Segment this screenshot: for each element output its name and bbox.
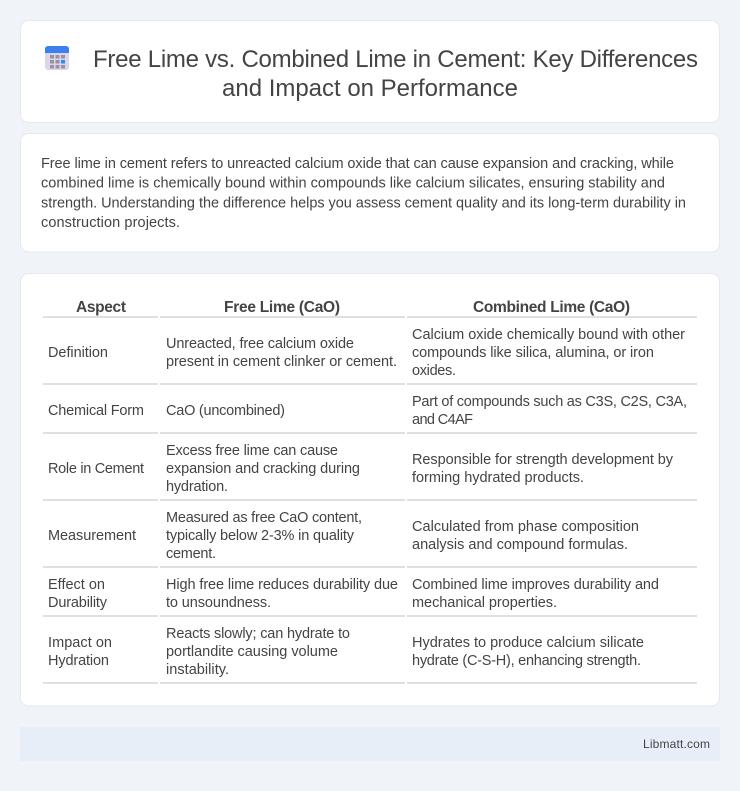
row: definition [48, 327, 685, 379]
row: impact on hydration: portlandite causing volume [166, 644, 338, 660]
row: chemical form: Part of compounds such as C3S, C2S, C3A, [412, 394, 687, 410]
row: effect on durability: to unsoundness. [166, 595, 271, 611]
row: definition: Calcium oxide chemically bound with other [412, 327, 685, 343]
row: effect on durability: Combined lime improves durability and [412, 577, 659, 593]
footer credit: Libmatt.com [643, 737, 710, 751]
row: definition: oxides. [412, 363, 456, 379]
row: measurement: typically below 2-3% in quality [166, 528, 355, 544]
intro text [41, 156, 686, 231]
row: definition: present in cement clinker or cement. [166, 354, 397, 370]
intro text: Free lime in cement refers to unreacted calcium oxide that can cause expansion and cracking, while [41, 156, 674, 172]
row: definition: Definition [48, 345, 108, 361]
row: chemical form: Chemical Form [48, 403, 144, 419]
row: measurement [48, 510, 639, 562]
row: measurement: Measurement [48, 528, 136, 544]
table header row [76, 299, 630, 316]
row: measurement: analysis and compound formulas. [412, 537, 628, 553]
panel: introduction [20, 134, 720, 252]
row: definition: Unreacted, free calcium oxide [166, 336, 354, 352]
row: impact on hydration: Reacts slowly; can hydrate to [166, 626, 350, 642]
row: chemical form: and C4AF [412, 412, 473, 428]
row: role in cement [48, 443, 674, 495]
row: impact on hydration [48, 626, 644, 678]
panel: comparison table [20, 274, 720, 706]
intro text: strength. Understanding the difference helps you assess cement quality and its long-term durability in [41, 196, 686, 212]
intro text: combined lime is chemically bound within compounds like calcium silicates, ensuring stability and [41, 176, 665, 192]
row: measurement: Calculated from phase composition [412, 519, 639, 535]
row: effect on durability: Durability [48, 595, 108, 611]
row: effect on durability [48, 577, 659, 611]
title [93, 46, 698, 102]
row: chemical form [48, 394, 687, 428]
row: impact on hydration: Hydration [48, 653, 109, 669]
icon: calendar [45, 46, 69, 70]
footer bar [20, 727, 720, 761]
title: Free Lime vs. Combined Lime in Cement: Key Differences [93, 46, 698, 73]
row: definition: compounds like silica, alumina, or iron [412, 345, 654, 361]
row: chemical form: CaO (uncombined) [166, 403, 285, 419]
row: impact on hydration: Hydrates to produce calcium silicate [412, 635, 644, 651]
row: role in cement: Responsible for strength development by [412, 452, 674, 468]
row: role in cement: forming hydrated products. [412, 470, 584, 486]
row: effect on durability: mechanical properties. [412, 595, 557, 611]
row: effect on durability: High free lime reduces durability due [166, 577, 398, 593]
intro text: construction projects. [41, 215, 180, 231]
table header row: Combined Lime (CaO) [473, 299, 630, 316]
row: measurement: Measured as free CaO content, [166, 510, 362, 526]
row: impact on hydration: Impact on [48, 635, 112, 651]
table header row: Aspect [76, 299, 126, 316]
row: role in cement: hydration. [166, 479, 228, 495]
row: effect on durability: Effect on [48, 577, 105, 593]
row: role in cement: Excess free lime can cause [166, 443, 338, 459]
title: and Impact on Performance [222, 75, 518, 102]
table header row: Free Lime (CaO) [224, 299, 340, 316]
row: role in cement: expansion and cracking during [166, 461, 360, 477]
panel: title card [20, 20, 720, 122]
row: role in cement: Role in Cement [48, 461, 144, 477]
row: measurement: cement. [166, 546, 216, 562]
row: impact on hydration: hydrate (C-S-H), enhancing strength. [412, 653, 641, 669]
row: impact on hydration: instability. [166, 662, 229, 678]
